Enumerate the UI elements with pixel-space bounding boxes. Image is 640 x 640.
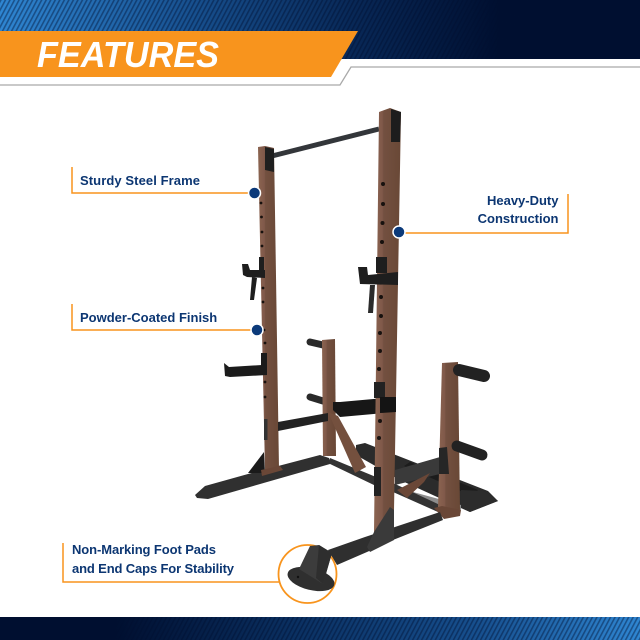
rear pegs [310,342,323,401]
squat rack [195,108,498,565]
right post top plate [391,109,401,142]
right post mid plate [374,382,385,398]
callout: heavy-duty construction: Heavy-Duty [487,193,559,208]
callout: foot pads: and End Caps For Stability [72,561,235,576]
callout: foot pads [63,542,337,603]
middle upright [322,339,336,456]
far base end [461,490,498,512]
left black gusset [248,452,265,473]
right frame upper peg [459,370,484,376]
upper right j-hook [358,257,398,313]
rear tray and slats [356,443,498,512]
upper left j-hook [242,257,265,300]
callout: heavy-duty construction: Construction [478,211,559,226]
pull-up bar [268,129,379,157]
header band [0,0,640,77]
lower left arm [224,353,267,377]
left upright post [258,146,279,470]
second diagonal brace [397,473,430,498]
front base beam [328,512,443,565]
callout: foot pads: Non-Marking Foot Pads [72,542,216,557]
left post lower plate [264,419,268,440]
right frame foot bracket [434,506,461,519]
callout: powder-coated finish: Powder-Coated Finish [80,310,217,325]
right upright post [374,108,401,532]
crossbar [278,413,328,431]
right frame lower peg [457,446,482,455]
left post holes [260,202,266,398]
sleeve collar [380,397,396,413]
side base bar right of post [393,483,440,512]
foot pad magnifier [278,545,337,603]
right post holes [377,182,385,440]
side base bar [328,458,376,486]
front gusset [367,507,394,552]
callout: sturdy steel frame: Sturdy Steel Frame [80,173,200,188]
callout: powder-coated finish [72,304,263,336]
footer band [0,617,640,640]
callout: sturdy steel frame [72,167,260,199]
side post plate [374,467,381,496]
right frame plate [439,447,449,474]
callout: heavy-duty construction [393,193,568,238]
header white and gray outline [0,67,640,85]
left foot bracket [261,466,283,476]
title banner [0,31,358,77]
left foot beam [195,455,330,499]
top plate left [265,147,274,172]
right frame post [438,362,460,510]
lower sleeve [333,397,396,417]
right frame side bar [395,455,448,485]
diagonal brace [328,412,366,473]
title text: FEATURES [37,34,219,75]
